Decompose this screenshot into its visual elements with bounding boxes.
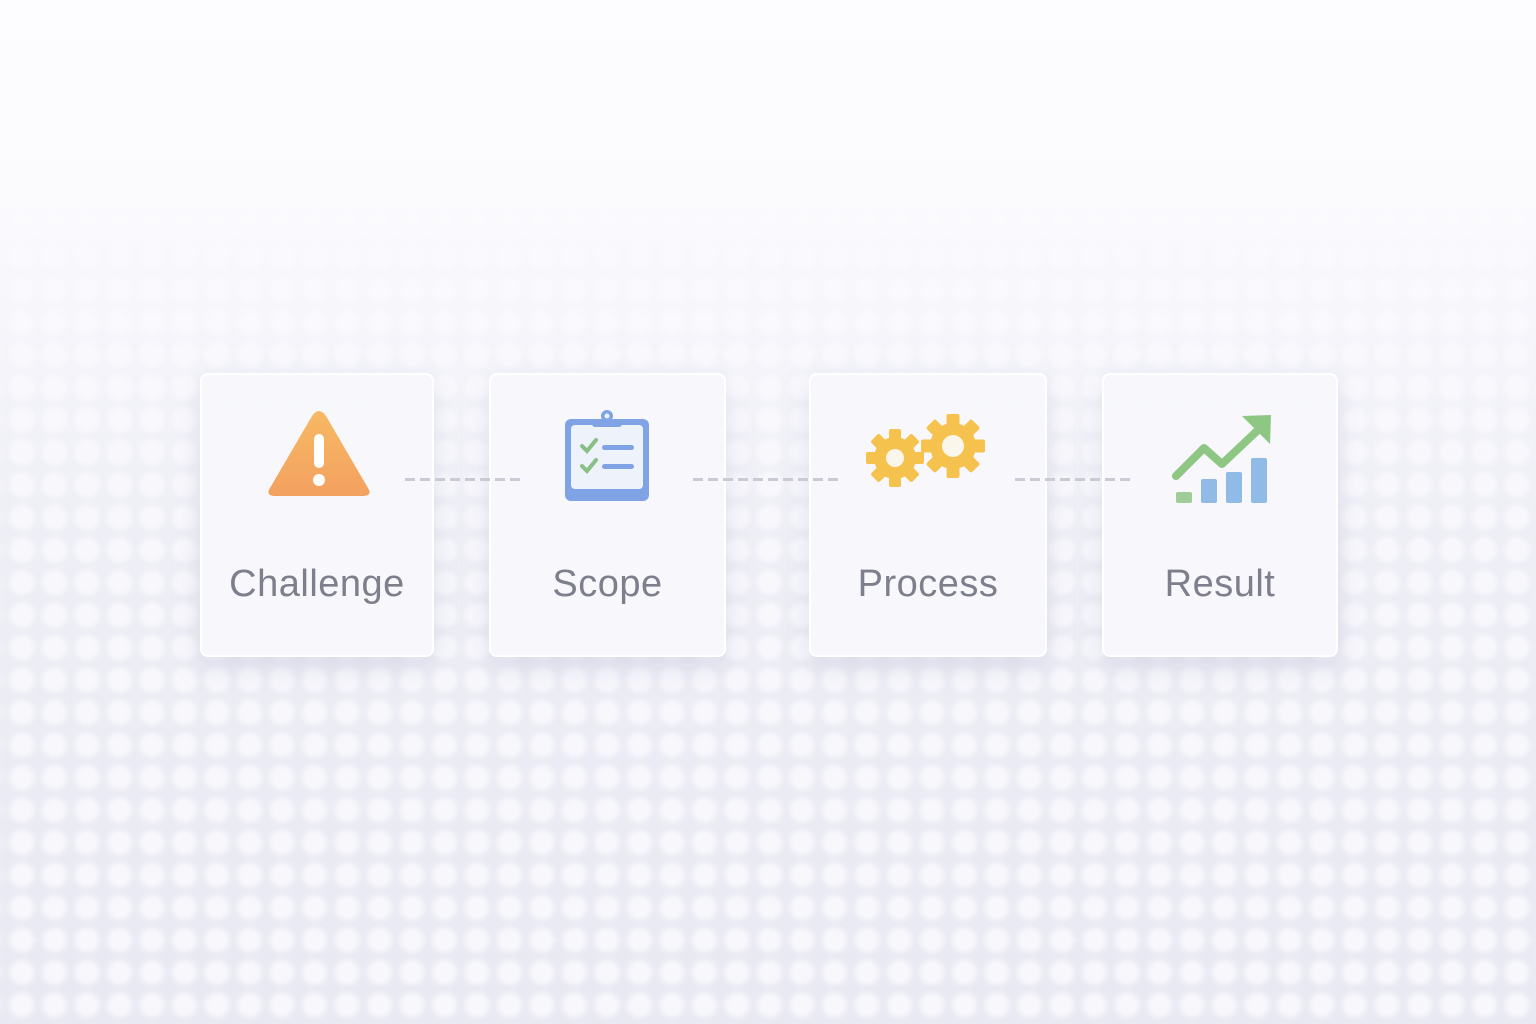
card: challenge bbox=[200, 373, 434, 657]
label: Challenge: Challenge bbox=[229, 563, 405, 605]
card: process bbox=[809, 373, 1047, 657]
label: Result: Result bbox=[1165, 563, 1275, 605]
card: scope bbox=[489, 373, 726, 657]
card: result bbox=[1102, 373, 1338, 657]
connector 2 bbox=[693, 478, 841, 481]
label: Process: Process bbox=[858, 563, 998, 605]
icon: warning bbox=[268, 411, 370, 496]
icon: growth chart bbox=[1172, 415, 1271, 503]
label: Scope: Scope bbox=[552, 563, 663, 605]
connector 3 bbox=[1015, 478, 1135, 481]
icon: clipboard bbox=[565, 410, 649, 501]
icon: gears bbox=[866, 414, 985, 487]
connector 1 bbox=[405, 478, 523, 481]
